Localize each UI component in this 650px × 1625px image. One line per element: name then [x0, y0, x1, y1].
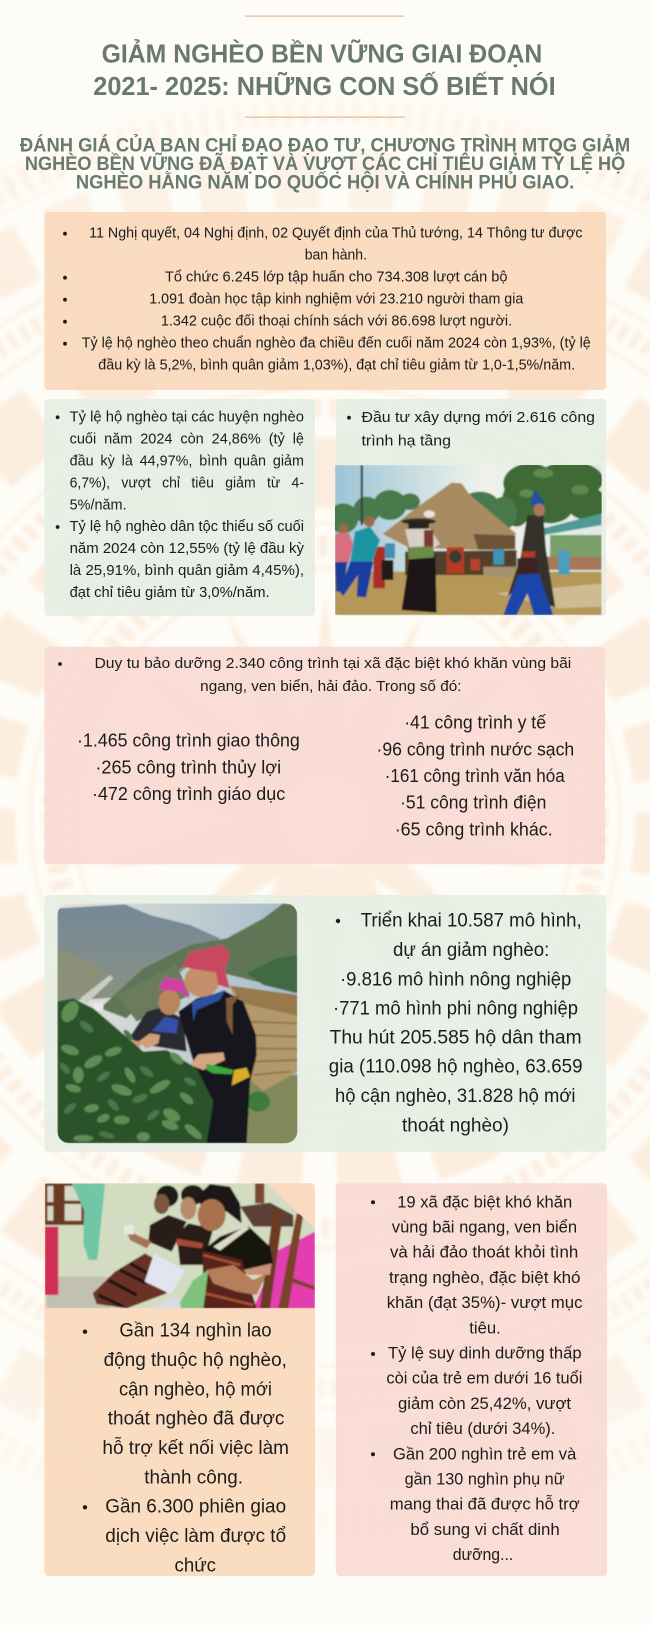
subtitle: ĐÁNH GIÁ CỦA BAN CHỈ ĐẠO ĐẠO TƯ, CHƯƠNG TRÌNH MTQG GIẢM — [20, 135, 630, 157]
panel: poverty reduction models — [44, 895, 606, 1152]
list: right column of works: ·96 công trình nước sạch — [376, 739, 574, 759]
panel: job connection: chức — [174, 1555, 216, 1576]
panel: policy and training figures: 1.342 cuộc đối thoại chính sách với 86.698 lượt người. — [161, 312, 512, 329]
panel: policy and training figures: Tổ chức 6.245 lớp tập huấn cho 734.308 lượt cán bộ — [165, 268, 508, 285]
panel: maintenance of works: ngang, ven biển, hải đảo. Trong số đó: — [200, 678, 461, 695]
panel: poverty rates in poor districts and ethnic minorities: đạt chỉ tiêu giảm từ 3,0%/năm. — [70, 584, 270, 601]
panel: poverty reduction models: thoát nghèo) — [402, 1115, 509, 1136]
list: left column of works: ·1.465 công trình giao thông — [77, 731, 300, 751]
panel: policy and training figures: ban hành. — [305, 246, 367, 263]
panel: policy and training figures: 11 Nghị quyết, 04 Nghị định, 02 Quyết định của Thủ tướng, 14 Thông tư được — [89, 224, 583, 241]
panel: new infrastructure: trình hạ tầng — [362, 433, 451, 450]
panel: communes and nutrition results — [336, 1183, 607, 1576]
subtitle: NGHÈO HẰNG NĂM DO QUỐC HỘI VÀ CHÍNH PHỦ GIAO. — [76, 172, 574, 194]
top divider — [245, 16, 404, 17]
list: right column of works — [376, 712, 574, 839]
panel: poverty rates in poor districts and ethnic minorities: Tỷ lệ hộ nghèo tại các huyện nghèo — [70, 409, 304, 426]
panel: policy and training figures: đầu kỳ là 5,2%, bình quân giảm 1,03%), đạt chỉ tiêu giảm từ 1,0-1,5%/năm. — [98, 356, 575, 373]
panel: poverty rates in poor districts and ethnic minorities: năm 2024 còn 12,55% (tỷ lệ đầu kỳ — [70, 540, 304, 557]
title — [93, 38, 556, 101]
panel: new infrastructure — [336, 399, 606, 616]
list: right column of works: ·161 công trình văn hóa — [385, 766, 566, 786]
panel: job connection: thành công. — [144, 1467, 243, 1488]
panel: new infrastructure: Đầu tư xây dựng mới 2.616 công — [362, 409, 595, 426]
panel: communes and nutrition results: và hải đảo thoát khỏi tình — [390, 1243, 578, 1262]
panel: communes and nutrition results: vùng bãi ngang, ven biển — [392, 1218, 577, 1236]
panel: policy and training figures: Tỷ lệ hộ nghèo theo chuẩn nghèo đa chiều đến cuối năm 2024 còn 1,93%, (tỷ lệ — [82, 334, 591, 351]
list: right column of works: ·65 công trình khác. — [395, 819, 553, 839]
panel: communes and nutrition results: Gần 200 nghìn trẻ em và — [393, 1444, 577, 1463]
title: GIẢM NGHÈO BỀN VỮNG GIAI ĐOẠN — [102, 38, 542, 68]
panel: poverty rates in poor districts and ethnic minorities: Tỷ lệ hộ nghèo dân tộc thiểu số cuối — [70, 518, 304, 535]
list: left column of works — [77, 731, 300, 804]
panel: communes and nutrition results: tiêu. — [469, 1318, 501, 1337]
panel: communes and nutrition results: mang thai đã được hỗ trợ — [390, 1495, 580, 1514]
photo: women picking tea on mountainside — [57, 903, 300, 1145]
panel: poverty rates in poor districts and ethnic minorities: 6,7%), vượt chỉ tiêu giảm từ 4- — [70, 474, 304, 491]
panel: maintenance of works: Duy tu bảo dưỡng 2.340 công trình tại xã đặc biệt khó khăn vùng bãi — [94, 655, 571, 672]
panel: job connection: hỗ trợ kết nối việc làm — [102, 1437, 289, 1459]
panel: job connection: cận nghèo, hộ mới — [119, 1379, 272, 1400]
panel: job connection: động thuộc hộ nghèo, — [104, 1350, 287, 1371]
panel: communes and nutrition results: còi của trẻ em dưới 16 tuổi — [386, 1369, 582, 1388]
panel: poverty reduction models: gia (110.098 hộ nghèo, 63.659 — [329, 1057, 582, 1078]
panel: poverty rates in poor districts and ethnic minorities: cuối năm 2024 còn 24,86% (tỷ lệ — [70, 431, 304, 448]
panel: poverty rates in poor districts and ethnic minorities: 5%/năm. — [70, 496, 127, 513]
panel: poverty reduction models: Triển khai 10.587 mô hình, — [361, 911, 582, 932]
panel: poverty reduction models: ·771 mô hình phi nông nghiệp — [333, 999, 578, 1020]
list: left column of works: ·265 công trình thủy lợi — [95, 757, 281, 777]
panel: communes and nutrition results: gần 130 nghìn phụ nữ — [405, 1470, 565, 1488]
panel: policy and training figures: 1.091 đoàn học tập kinh nghiệm với 23.210 người tham gia — [149, 290, 524, 307]
panel: communes and nutrition results: Tỷ lệ suy dinh dưỡng thấp — [388, 1344, 582, 1362]
panel: poverty rates in poor districts and ethnic minorities: đầu kỳ là 44,97%, bình quân giảm — [70, 452, 304, 470]
title: 2021- 2025: NHỮNG CON SỐ BIẾT NÓI — [93, 71, 556, 101]
panel: job connection: Gần 134 nghìn lao — [119, 1321, 272, 1342]
panel: job connection: Gần 6.300 phiên giao — [105, 1497, 286, 1518]
panel: poverty rates in poor districts and ethnic minorities: là 25,91%, bình quân giảm 4,45%), — [70, 562, 304, 579]
panel: poverty reduction models: dự án giảm nghèo: — [393, 940, 549, 961]
panel: communes and nutrition results: giảm còn 25,42%, vượt — [398, 1394, 571, 1413]
photo: ethnic festival in front of stilt house — [328, 462, 607, 615]
panel: communes and nutrition results: dưỡng... — [453, 1545, 513, 1564]
list: left column of works: ·472 công trình giáo dục — [92, 784, 285, 804]
panel: communes and nutrition results: bổ sung vi chất dinh — [410, 1520, 560, 1539]
panel: communes and nutrition results: chỉ tiêu (dưới 34%). — [410, 1419, 555, 1438]
panel: job connection: thoát nghèo đã được — [108, 1409, 284, 1430]
subtitle: NGHÈO BỀN VỮNG ĐÃ ĐẠT VÀ VƯỢT CÁC CHỈ TIÊU GIẢM TỶ LỆ HỘ — [25, 153, 625, 175]
list: right column of works: ·51 công trình điện — [400, 793, 546, 813]
panel: poverty reduction models: ·9.816 mô hình nông nghiệp — [340, 969, 571, 990]
title divider — [245, 116, 405, 118]
panel: communes and nutrition results: khăn (đạt 35%)- vượt mục — [387, 1293, 583, 1312]
panel: poverty reduction models: hộ cận nghèo, 31.828 hộ mới — [335, 1086, 576, 1107]
panel: poverty rates in poor districts and ethnic minorities — [44, 399, 315, 616]
panel: communes and nutrition results: 19 xã đặc biệt khó khăn — [397, 1192, 572, 1211]
panel: job connection: dịch việc làm được tổ — [105, 1526, 286, 1547]
panel: poverty reduction models: Thu hút 205.585 hộ dân tham — [330, 1028, 582, 1049]
panel: job connection — [44, 1183, 315, 1576]
panel: policy and training figures — [44, 212, 606, 390]
subtitle — [20, 135, 630, 194]
panel: communes and nutrition results: trạng nghèo, đặc biệt khó — [389, 1268, 580, 1287]
photo: women in traditional dress reading documents — [45, 1183, 315, 1308]
panel: maintenance of works — [44, 647, 605, 864]
list: right column of works: ·41 công trình y tế — [404, 712, 546, 732]
